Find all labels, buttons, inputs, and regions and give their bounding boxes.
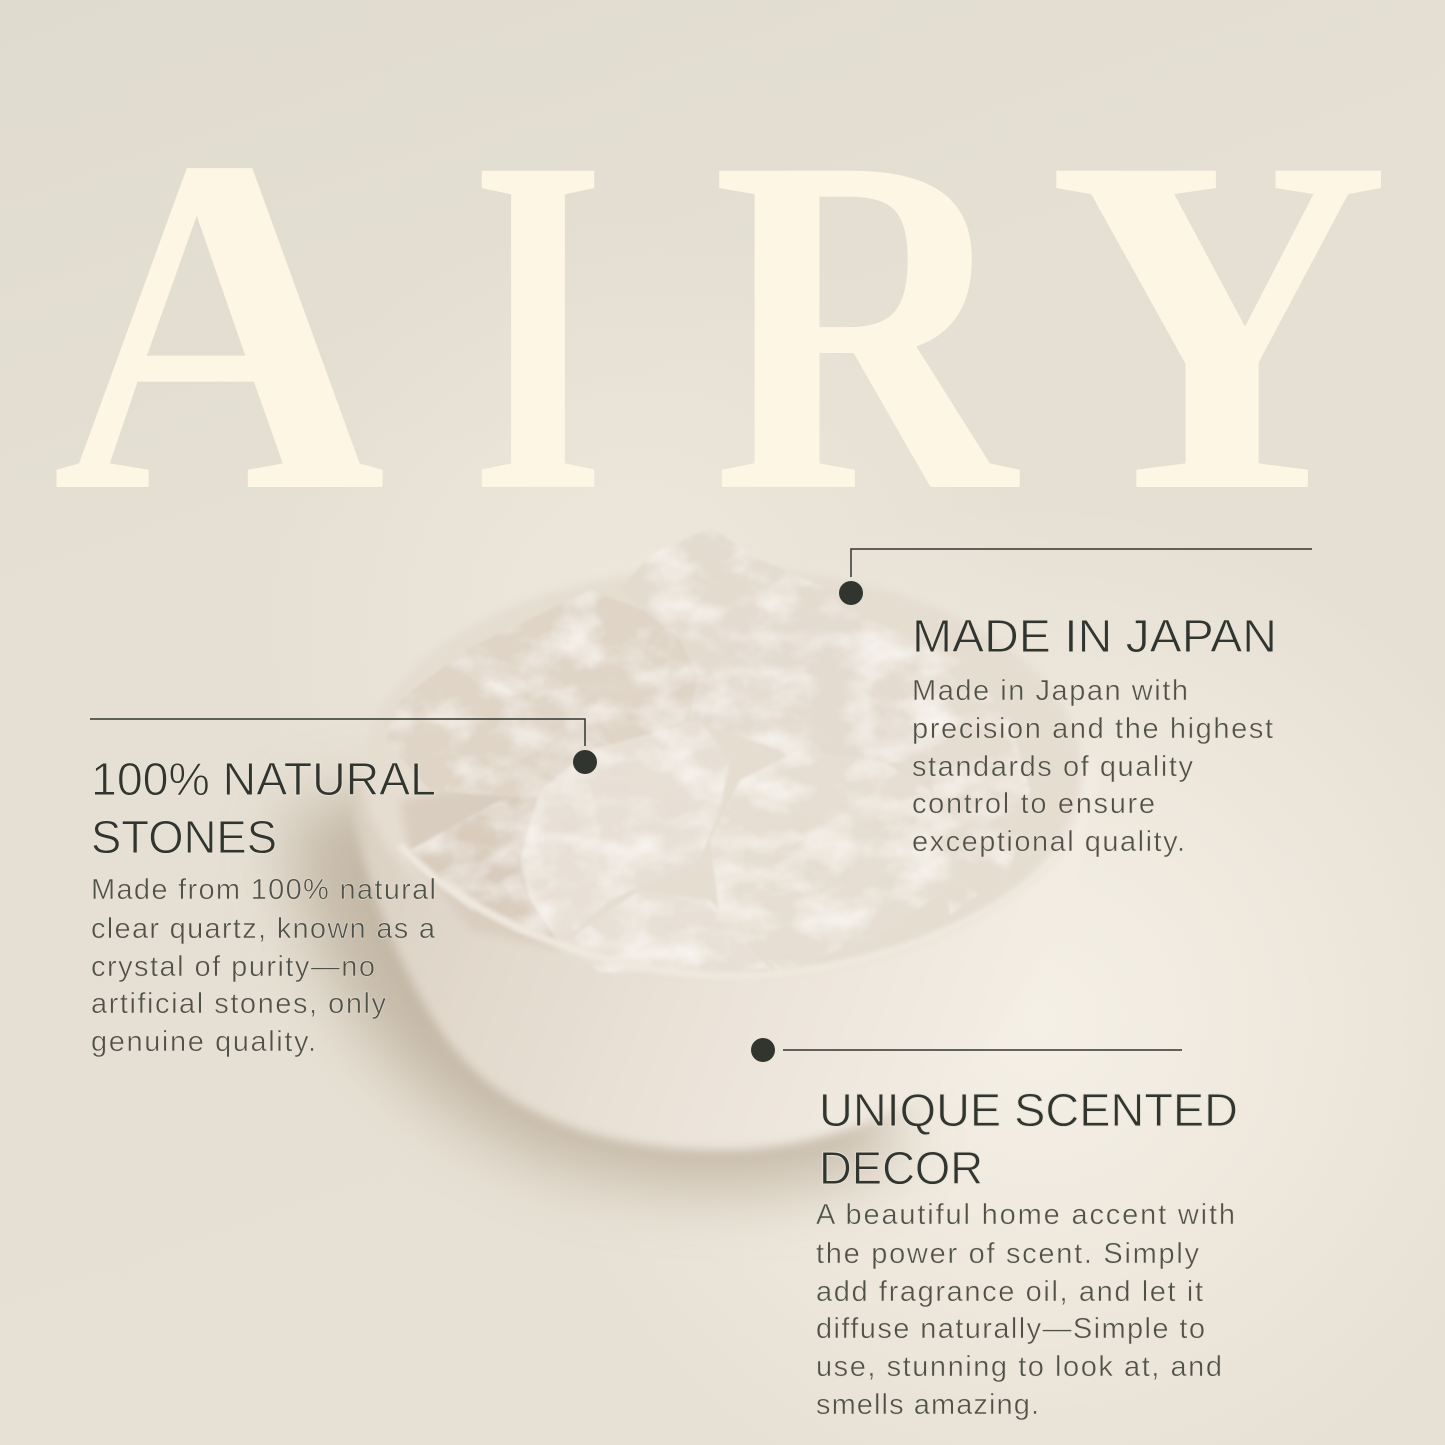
description: the power of scent. Simply	[816, 1238, 1200, 1270]
description: precision and the highest	[912, 713, 1273, 745]
bowl body	[352, 760, 1096, 1150]
heading: MADE IN JAPAN	[912, 610, 1277, 662]
description: genuine quality.	[91, 1026, 316, 1058]
crystal: centre stone	[520, 720, 730, 945]
crystal: bottom stone	[560, 890, 770, 976]
title: Y	[1048, 58, 1390, 592]
bowl rim	[400, 845, 1065, 976]
crystal: back top stone	[620, 527, 850, 680]
description: diffuse naturally—Simple to	[816, 1313, 1205, 1345]
marker dot	[573, 750, 597, 774]
description: exceptional quality.	[912, 826, 1185, 858]
description	[912, 675, 1273, 858]
description: artificial stones, only	[91, 988, 386, 1020]
heading	[819, 1084, 1238, 1194]
description	[816, 1199, 1235, 1421]
heading: STONES	[91, 811, 277, 863]
crystal: centre right stone	[710, 750, 960, 972]
title: A	[52, 58, 386, 592]
description: use, stunning to look at, and	[816, 1351, 1222, 1383]
bowl inside	[362, 567, 1082, 977]
title: I	[470, 58, 606, 592]
marker dot	[839, 581, 863, 605]
crystal: right stone	[850, 610, 1030, 915]
callout: made in japan	[839, 549, 1312, 858]
description: smells amazing.	[816, 1389, 1039, 1421]
description: standards of quality	[912, 751, 1194, 783]
crystal: back left stone	[385, 590, 700, 800]
title: R	[712, 58, 1021, 592]
connector line	[783, 1049, 1182, 1051]
description: A beautiful home accent with	[816, 1199, 1235, 1231]
callout: natural stones	[90, 719, 597, 1058]
connector line	[851, 549, 1312, 577]
heading: 100% NATURAL	[91, 753, 436, 805]
marker dot	[751, 1038, 775, 1062]
description: Made in Japan with	[912, 675, 1188, 707]
crystal: lower left stone	[410, 795, 560, 945]
callout: unique scented decor	[751, 1038, 1238, 1421]
description: add fragrance oil, and let it	[816, 1276, 1203, 1308]
crystal stones	[385, 527, 1030, 976]
description: control to ensure	[912, 788, 1155, 820]
description: clear quartz, known as a	[91, 913, 436, 945]
bowl shadow	[290, 790, 900, 1188]
description: Made from 100% natural	[91, 874, 436, 906]
heading: DECOR	[819, 1142, 983, 1194]
bowl photo	[290, 527, 1096, 1188]
shadow between stones	[400, 770, 560, 950]
description	[91, 874, 436, 1058]
title	[52, 58, 1390, 592]
connector line	[90, 719, 585, 746]
heading	[91, 753, 436, 863]
heading: UNIQUE SCENTED	[819, 1084, 1238, 1136]
description: crystal of purity—no	[91, 951, 375, 983]
crystal: upper centre stone	[690, 600, 930, 770]
